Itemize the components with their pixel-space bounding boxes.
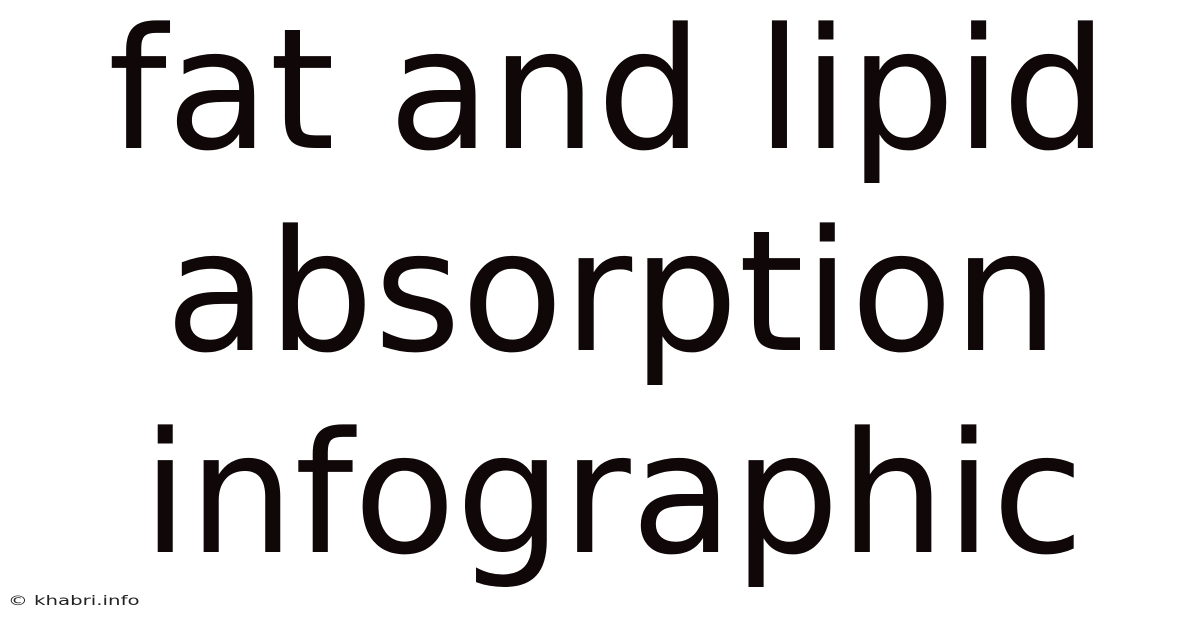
title: absorption — [165, 194, 1058, 390]
watermark credit: © khabri.info — [8, 594, 140, 609]
title: infographic — [142, 396, 1084, 592]
